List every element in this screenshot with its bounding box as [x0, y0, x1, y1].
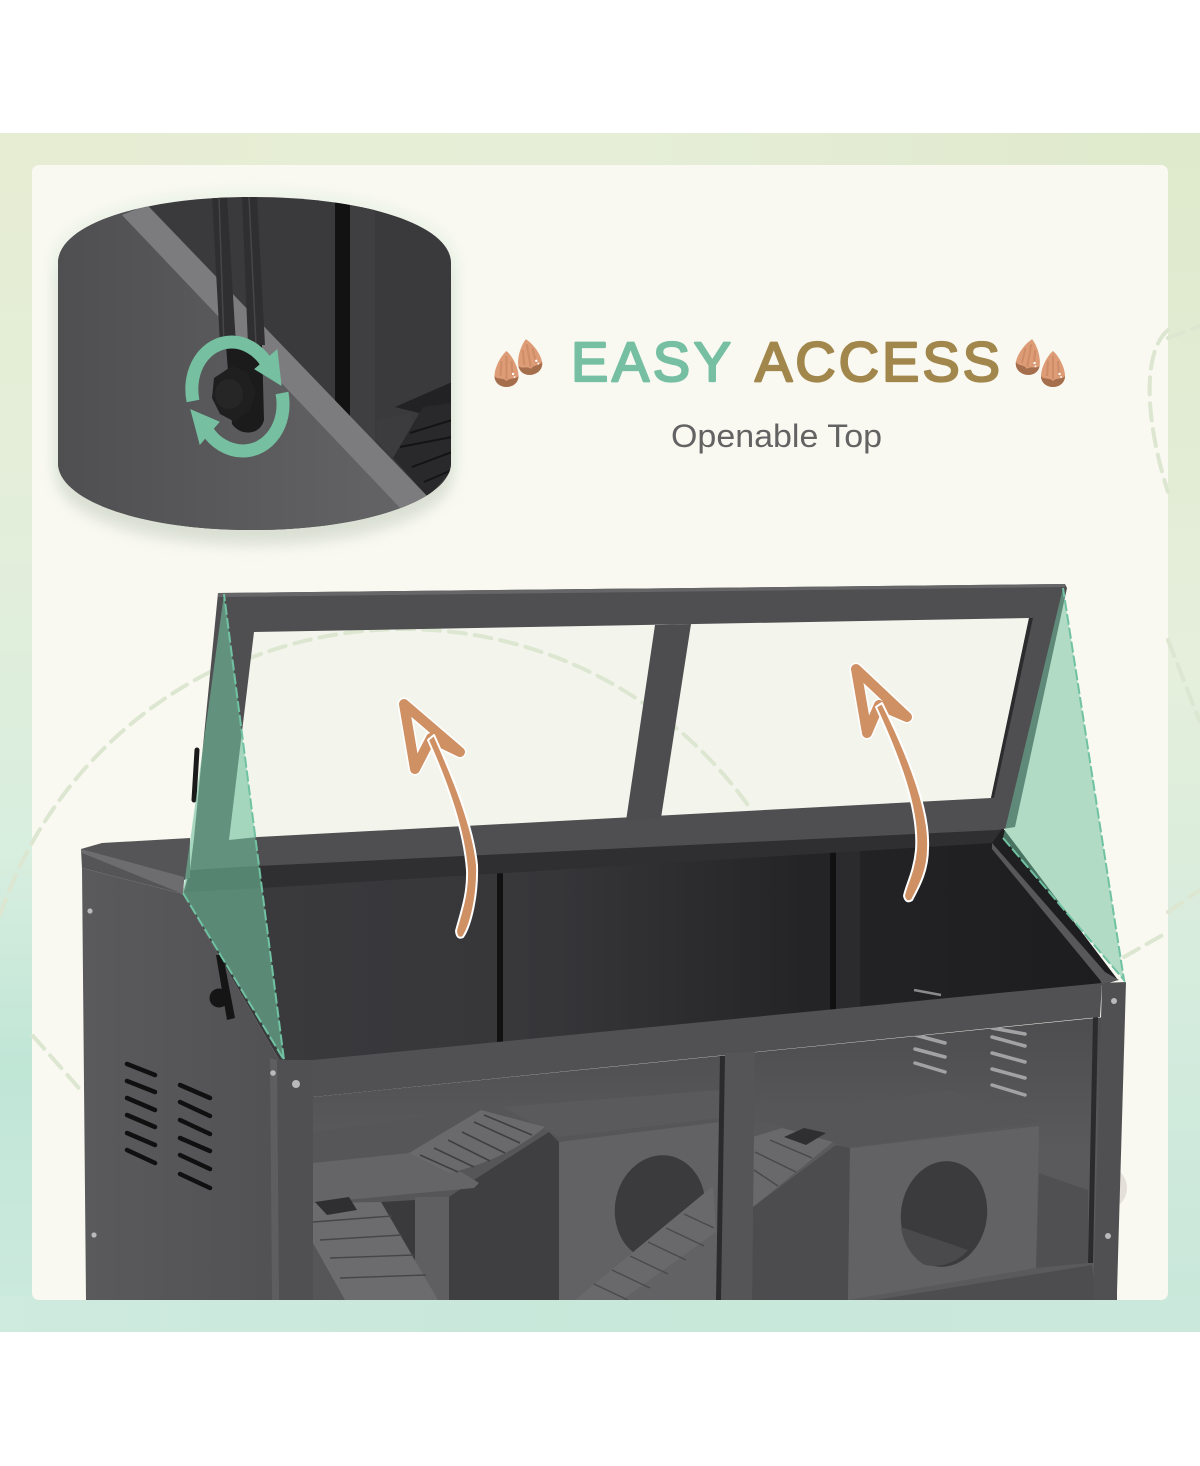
mullion edge: [716, 1056, 725, 1300]
arrow: right lift arrow: [856, 669, 928, 901]
title: EASY ACCESS: ACCESS: [755, 330, 1000, 393]
lid glass: [251, 628, 752, 810]
vents on back wall: [915, 1028, 1025, 1095]
green translucent triangle right: [1003, 588, 1124, 980]
inset photo: [40, 197, 452, 540]
dashed arc through glass: [245, 629, 750, 808]
inset glow: [58, 197, 451, 530]
inset detail: knob close-up: [40, 197, 452, 546]
cream panel: [32, 165, 1168, 1300]
title: EASY ACCESS: EASY: [571, 330, 731, 393]
icon: star knob: [212, 368, 232, 420]
side strap and knob: [210, 955, 235, 1020]
subtitle: Openable Top: Openable Top: [671, 418, 882, 454]
icon: almonds right: [1014, 337, 1065, 387]
side panel: [82, 868, 281, 1300]
left front post: [278, 1059, 313, 1300]
lid lip: [81, 849, 184, 894]
title: EASY ACCESS: [571, 330, 1000, 393]
hutch interior: [183, 828, 1118, 1065]
dashed decorative arcs: [0, 326, 1200, 1094]
icon: rotate arrows: [191, 342, 283, 451]
faint circle behind hutch: [1083, 1166, 1127, 1210]
side screws: [87, 908, 300, 1238]
green translucent triangle left: [183, 594, 284, 1060]
top lid left: [81, 838, 190, 894]
back wall behind glass: [313, 1017, 1105, 1300]
screws right post: [1105, 998, 1117, 1239]
side vents: [127, 1064, 210, 1188]
lid frame: [190, 584, 1067, 870]
right compartment: [752, 1017, 1098, 1300]
center mullion: [724, 1052, 755, 1202]
arrow: left lift arrow: [404, 704, 477, 938]
inset shadow: [58, 215, 451, 546]
hutch illustration: [81, 584, 1126, 1300]
right post: [1093, 982, 1126, 1300]
right lid seam: [992, 843, 1119, 984]
lid rail underside: [186, 828, 1003, 892]
front rail: [313, 983, 1102, 1097]
icon: almonds left: [494, 337, 544, 387]
left compartment: [313, 1090, 720, 1300]
